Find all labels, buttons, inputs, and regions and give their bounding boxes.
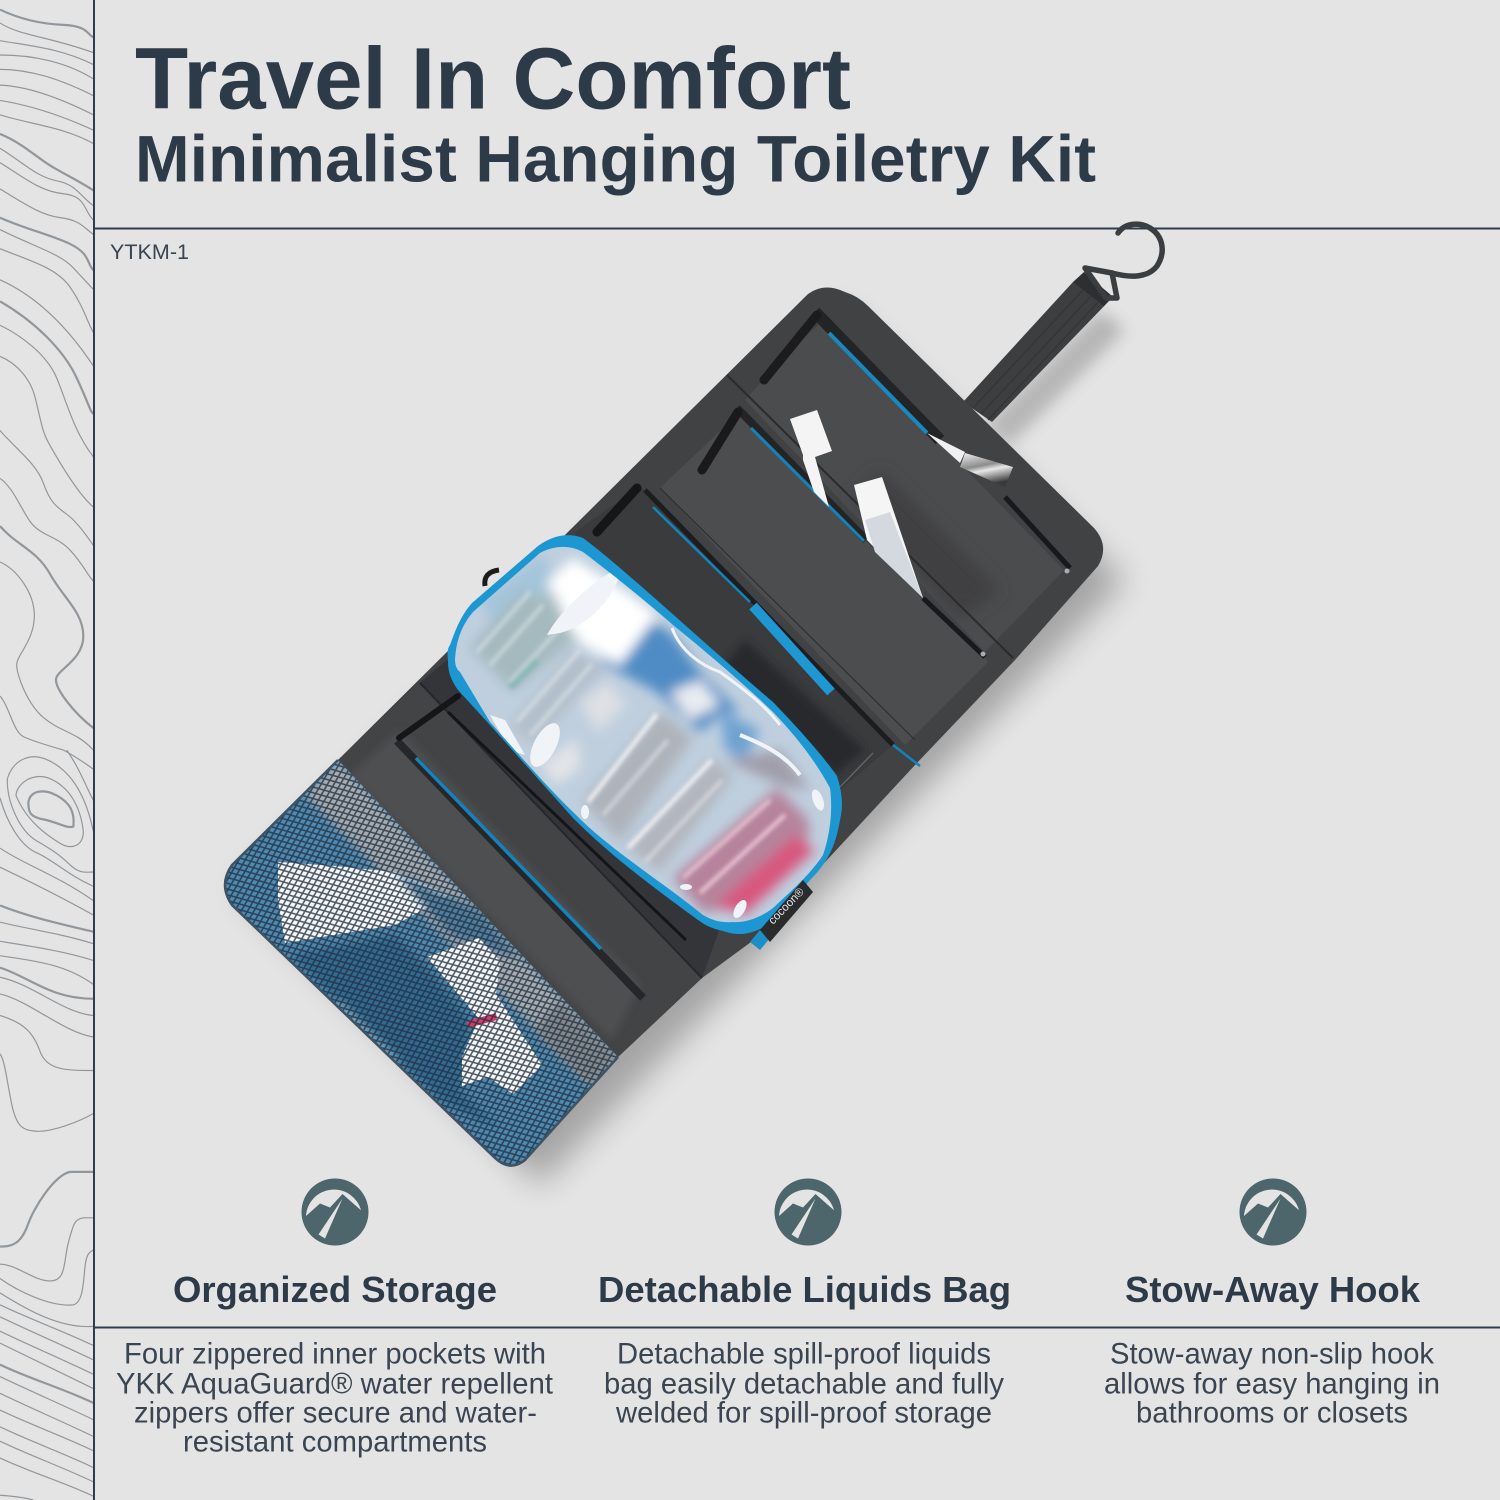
feature description: Detachable spill-proof liquids: [617, 1338, 991, 1370]
title: Travel In Comfort: [135, 30, 851, 128]
icon: mountain badge: [774, 1178, 842, 1246]
feature description: allows for easy hanging in: [1104, 1368, 1440, 1400]
second pocket: [660, 375, 1013, 745]
feature heading: Detachable Liquids Bag: [598, 1269, 1011, 1310]
subtitle: Minimalist Hanging Toiletry Kit: [135, 122, 1096, 196]
feature description: [604, 1338, 1004, 1430]
mesh pocket: [226, 760, 618, 1164]
product photo: hanging toiletry kit: [200, 224, 1162, 1185]
liquids bag border: [448, 535, 842, 934]
top pocket: [745, 312, 1070, 652]
feature heading: Organized Storage: [173, 1269, 497, 1310]
feature description: YKK AquaGuard® water repellent: [116, 1368, 553, 1400]
feature description: [116, 1338, 553, 1458]
liquids bag handle: [485, 570, 499, 586]
brand tab: [750, 880, 813, 950]
bag panel: [338, 287, 1103, 1057]
razor: [927, 433, 1013, 487]
strap shadow: [985, 310, 1125, 445]
feature description: zippers offer secure and water-: [134, 1398, 537, 1430]
feature description: resistant compartments: [183, 1426, 487, 1458]
model number: YTKM-1: [110, 240, 189, 264]
feature heading: Stow-Away Hook: [1125, 1269, 1421, 1310]
bag film highlights: [490, 570, 826, 920]
feature column: organized storage: [116, 1178, 553, 1458]
feature description: welded for spill-proof storage: [615, 1398, 992, 1430]
toothpaste tube: [854, 477, 923, 598]
hanging strap and hook: [963, 224, 1162, 422]
icon: mountain badge: [1240, 1178, 1306, 1246]
feature description: Stow-away non-slip hook: [1110, 1338, 1434, 1370]
mesh edge binding: [225, 760, 618, 1166]
feature description: [1104, 1338, 1440, 1430]
third pocket: [575, 486, 920, 790]
feature description: Four zippered inner pockets with: [124, 1338, 546, 1370]
bag shadow: [240, 310, 1125, 1185]
brand tab: cocoon®: [767, 886, 807, 927]
feature description: bag easily detachable and fully: [604, 1368, 1004, 1400]
lower pockets: [338, 640, 730, 1057]
toothbrush: [790, 410, 832, 507]
topographic contour strip: [0, 10, 93, 1500]
feature description: bathrooms or closets: [1136, 1398, 1408, 1430]
liquids bag contents: [455, 546, 832, 922]
feature column: stow-away hook: [1104, 1178, 1440, 1430]
icon: mountain badge: [302, 1178, 368, 1246]
feature column: detachable liquids bag: [598, 1178, 1011, 1430]
